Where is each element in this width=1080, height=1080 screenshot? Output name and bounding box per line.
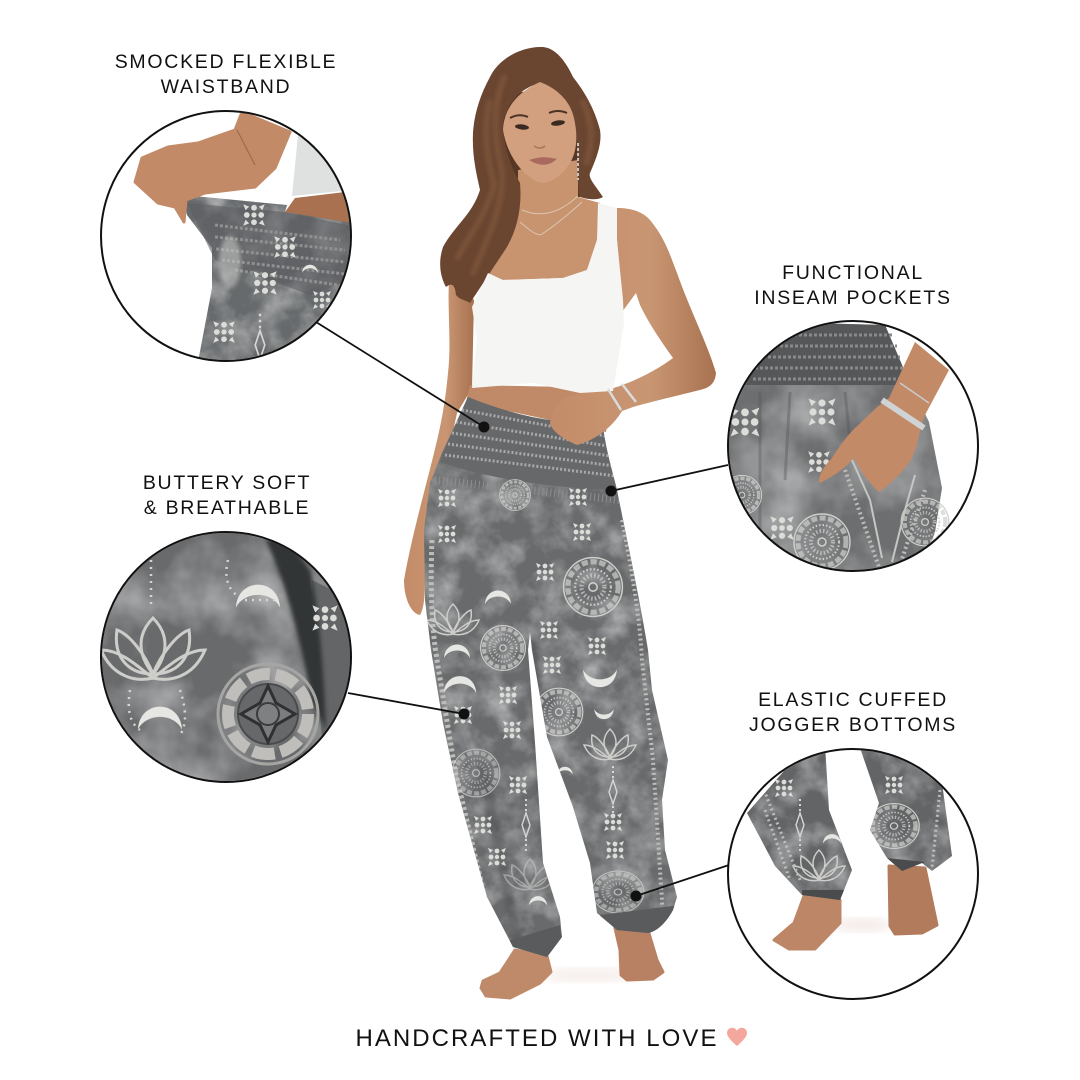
model figure (400, 47, 716, 998)
detail circle: pockets (722, 320, 980, 572)
callout: waistband connector (316, 322, 490, 432)
side seams (622, 520, 663, 917)
callout: cuff connector (630, 865, 729, 902)
leg shading (480, 760, 520, 950)
callout: fabric connector (348, 693, 470, 720)
detail circle: fabric (100, 530, 352, 782)
heading: buttery soft and breathable: & BREATHABLE (144, 497, 310, 519)
callout: pocket connector (606, 465, 728, 496)
footer tagline: HANDCRAFTED WITH LOVE (355, 1025, 719, 1052)
patterned pants (424, 397, 677, 957)
facial features (510, 111, 578, 180)
heading: buttery soft and breathable: BUTTERY SOFT (143, 472, 311, 494)
heading: smocked flexible waistband: WAISTBAND (161, 76, 291, 98)
heading: elastic cuffed jogger bottoms: JOGGER BOTTOMS (749, 714, 957, 736)
icon: heart (727, 1028, 747, 1046)
right arm and hand (550, 208, 716, 445)
left arm (404, 270, 474, 615)
smocked waistband (435, 395, 622, 500)
midriff (466, 385, 614, 432)
necklace (520, 196, 582, 235)
ankle cuffs (510, 925, 562, 957)
white crop top (472, 203, 624, 393)
face (503, 82, 576, 183)
heading: elastic cuffed jogger bottoms: ELASTIC CUFFED (758, 689, 948, 711)
neck and chest (487, 160, 600, 280)
hair (440, 47, 603, 303)
left foot (481, 950, 551, 998)
detail circle: waistband (100, 110, 352, 376)
heading: functional inseam pockets: INSEAM POCKETS (754, 287, 952, 309)
heading: smocked flexible waistband: SMOCKED FLEXIBLE (115, 51, 337, 73)
floor shadow (540, 968, 640, 982)
back hair (500, 85, 590, 215)
motifs (564, 558, 622, 616)
hand in pocket (819, 342, 949, 492)
hair highlights (456, 75, 591, 275)
right foot (615, 928, 663, 980)
large mandala (218, 664, 318, 764)
heading: functional inseam pockets: FUNCTIONAL (782, 262, 924, 284)
bracelets (608, 384, 636, 410)
detail circle: cuffs (728, 745, 980, 1000)
